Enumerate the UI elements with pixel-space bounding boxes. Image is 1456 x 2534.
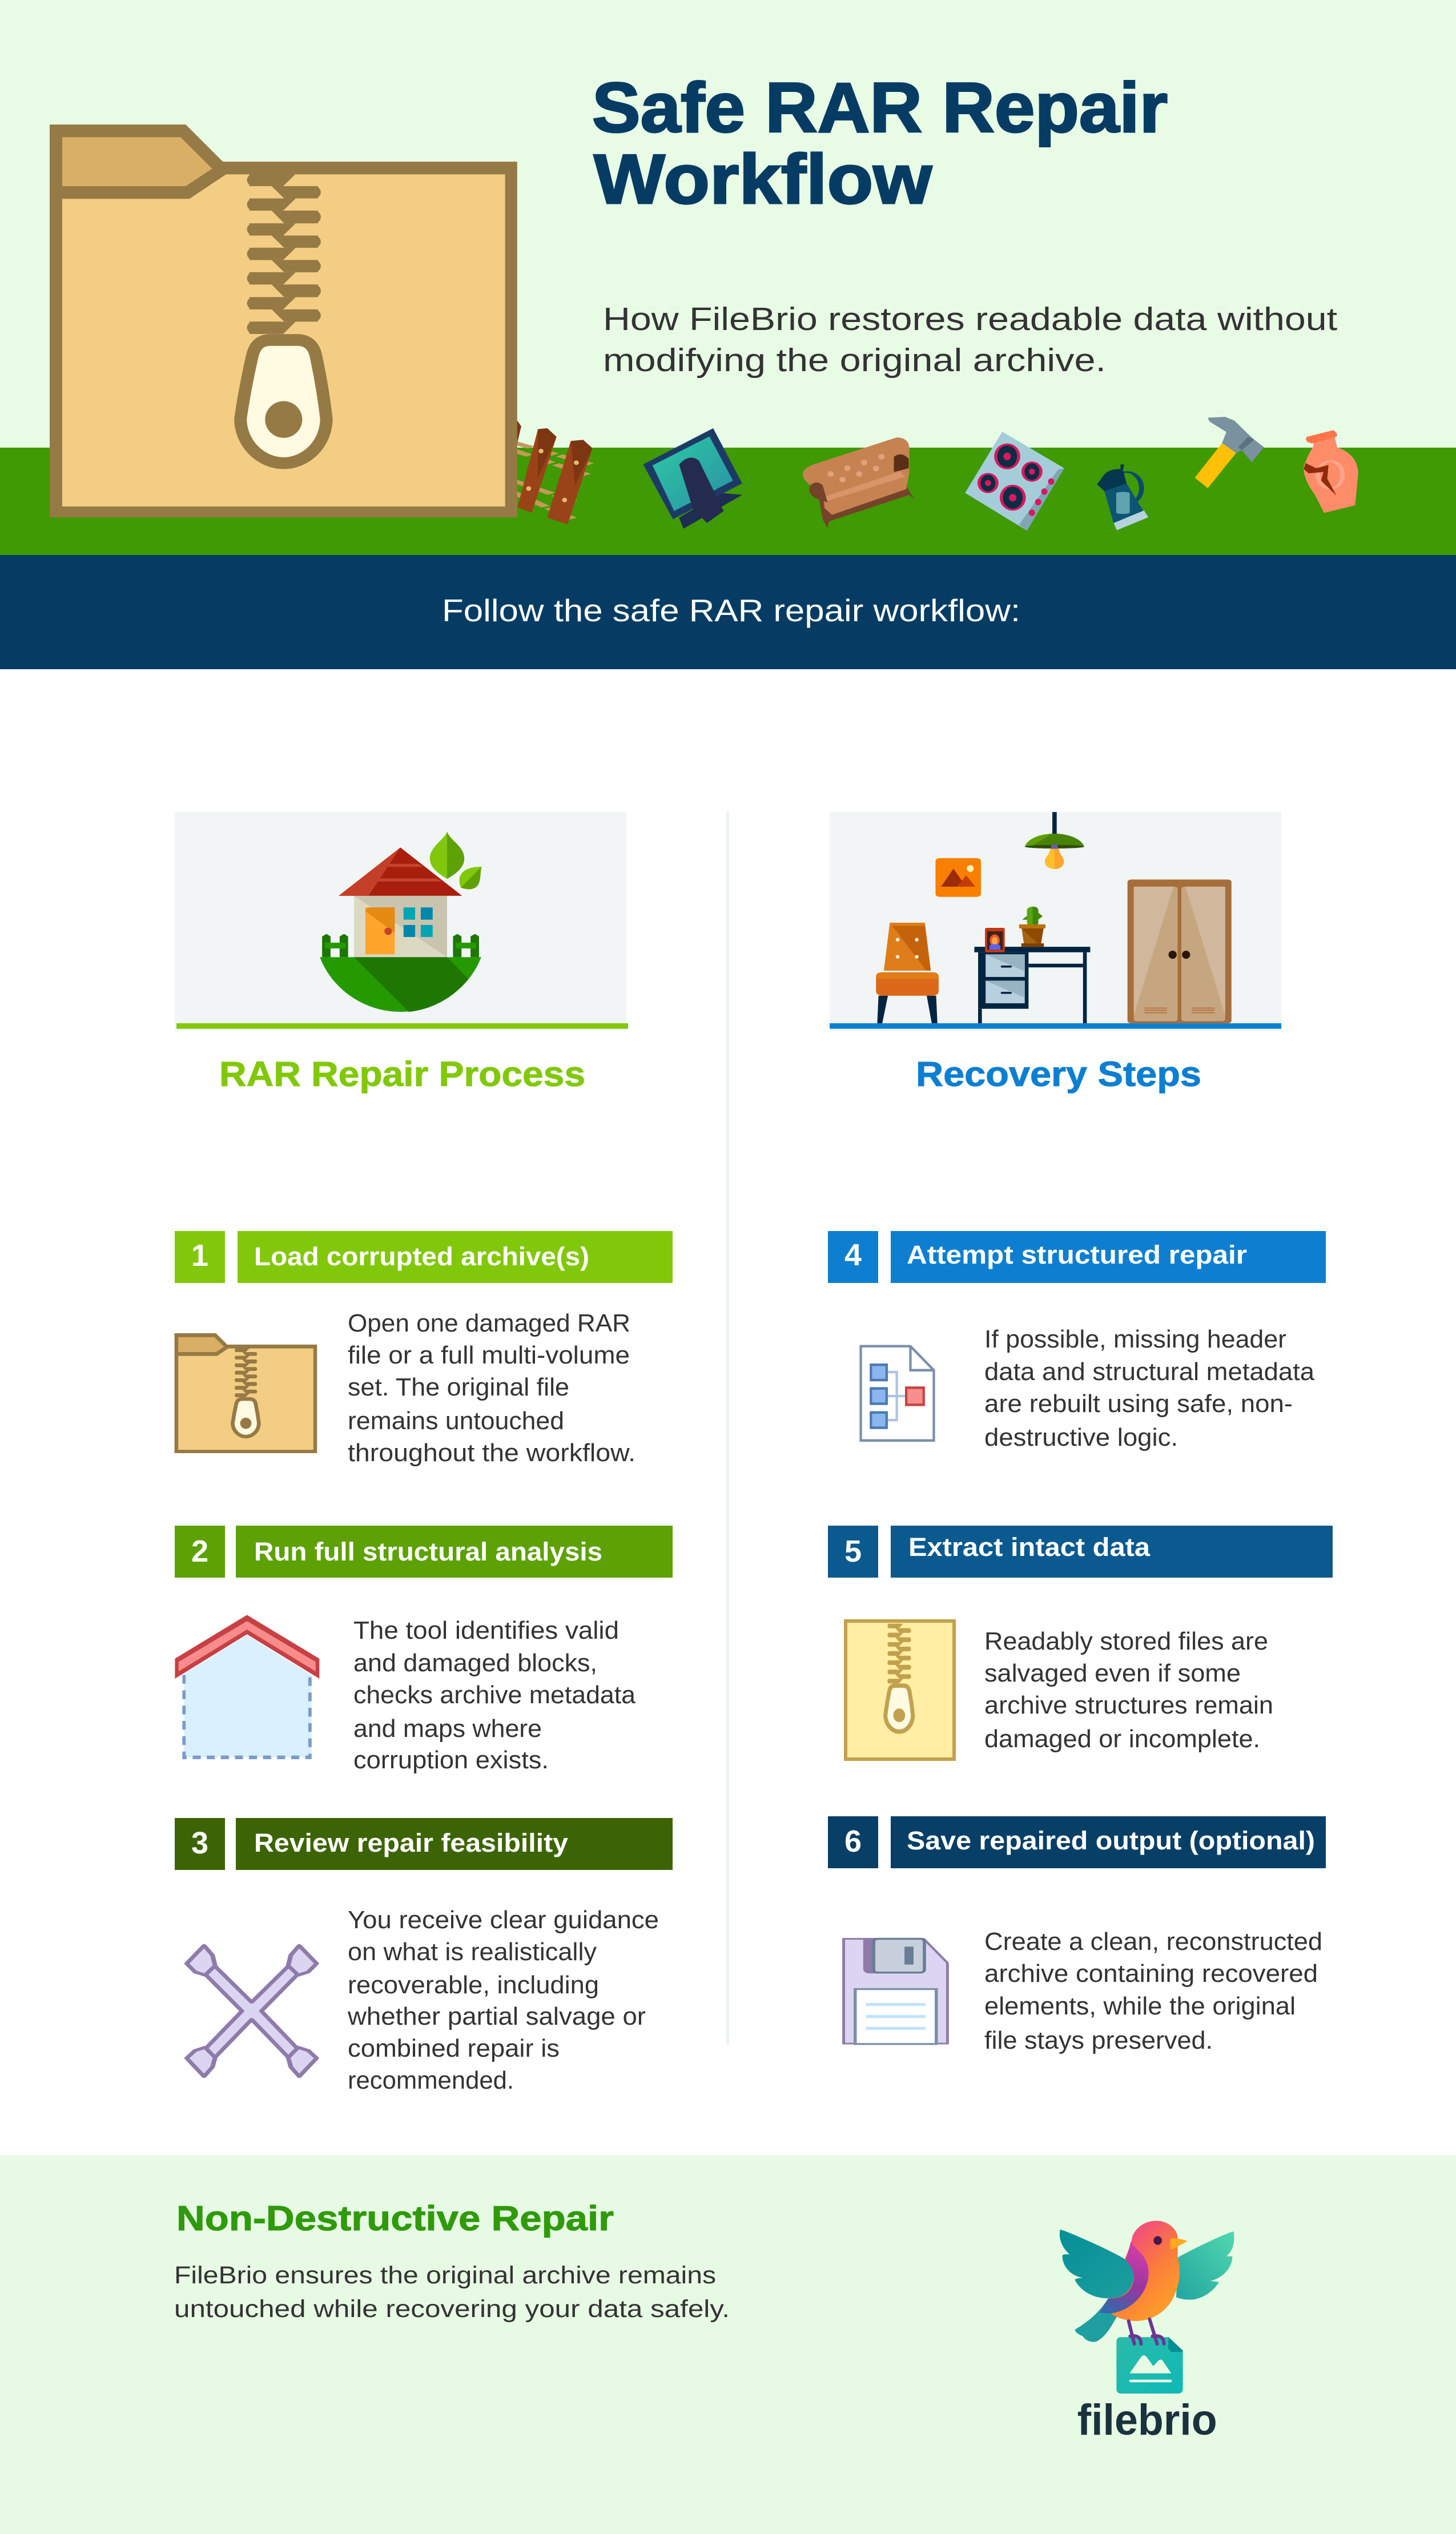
step 4 text [984,1325,1315,1451]
icon: structure document [861,1346,934,1441]
icon: wardrobe [1128,879,1232,1023]
panel: green ground band [0,448,1456,555]
title: Workflow [594,140,932,219]
banner [0,555,1456,669]
icon: photo frame [985,928,1005,952]
title bar 3 [236,1818,673,1870]
icon: fence [510,421,593,524]
step 2 text: The tool identifies valid [353,1616,619,1644]
subtitle [603,301,1337,379]
icon: beak [1170,2238,1188,2250]
banner text: Follow the safe RAR repair workflow: [442,593,1020,628]
title: Safe RAR Repair [592,69,1168,147]
step 5 text: archive structures remain [984,1691,1273,1719]
title bar 5 [891,1526,1333,1578]
icon: ground [320,957,481,1012]
step 2 text: and damaged blocks, [353,1649,597,1677]
icon: kettle [1097,464,1148,530]
title bar 6 [891,1816,1326,1868]
step 5 text: salvaged even if some [984,1659,1241,1687]
number badge 6 [828,1816,878,1868]
subtitle: How FileBrio restores readable data without [603,301,1337,337]
step 3 text: recoverable, including [348,1971,599,1999]
step 4 text: If possible, missing header [984,1325,1286,1353]
footer text [174,2262,730,2323]
icon: fences [322,934,479,957]
icon: chair [876,923,939,1023]
step 5 text [984,1627,1273,1753]
wordmark: filebrio [1077,2396,1217,2444]
number 1: 1 [191,1238,208,1273]
step 4 text: are rebuilt using safe, non- [984,1390,1293,1418]
title bar 4 [891,1231,1326,1283]
step 1 text: remains untouched [348,1407,564,1435]
step 3 text: whether partial salvage or [347,2002,646,2030]
step 6 text: Create a clean, reconstructed [984,1928,1322,1956]
icon: fallen monitor [643,428,742,529]
step 6 text: archive containing recovered [984,1960,1318,1988]
step 3 text: recommended. [348,2066,514,2094]
step 4 [828,1231,1326,1451]
icon: cooktop [965,432,1064,530]
step 1 text [348,1309,636,1467]
icon: desk [974,947,1090,1023]
step 3 title: Review repair feasibility [254,1828,568,1857]
panel: house illustration [175,812,628,1031]
step 1 text: file or a full multi-volume [348,1341,630,1369]
step 3 text [347,1906,659,2094]
title bar 1 [238,1231,673,1283]
icon: floppy disk [844,1938,947,2044]
icon: body [1099,2221,1180,2321]
number 6: 6 [844,1824,862,1859]
icon: eye [1153,2236,1162,2245]
step 6 [828,1816,1326,2054]
icon: house outline [175,1615,319,1757]
title bar 2 [236,1526,673,1578]
number 3: 3 [191,1826,208,1860]
number badge 4 [828,1231,878,1283]
heading: RAR Repair Process: RAR Repair Process [219,1055,585,1093]
panel: footer background [0,2155,1456,2534]
step 1 text: Open one damaged RAR [348,1309,630,1337]
icon: cross wrench [187,1945,317,2077]
step 1 text: throughout the workflow. [348,1439,636,1467]
panel: header background [0,0,1456,448]
icon: hammer [1194,417,1264,488]
number 4: 4 [844,1238,862,1272]
icon: house [339,847,462,957]
icon: broken vase [1304,430,1358,513]
icon: document [1116,2337,1183,2394]
step 4 title: Attempt structured repair [907,1240,1247,1269]
panel: room illustration [830,812,1281,1031]
number badge 2 [175,1526,225,1578]
footer text: FileBrio ensures the original archive remains [174,2262,716,2289]
step 3 [175,1818,673,2094]
step 4 text: destructive logic. [984,1423,1178,1451]
icon: zip file [846,1621,954,1759]
column divider [726,811,729,2044]
title [592,69,1168,219]
footer text: untouched while recovering your data safely. [174,2295,730,2323]
step 2 text: and maps where [353,1715,542,1743]
step 2 text: checks archive metadata [353,1681,636,1709]
step 1 text: set. The original file [348,1373,569,1401]
step 3 text: on what is realistically [348,1938,597,1966]
ground objects row [510,417,1358,530]
footer heading: Non-Destructive Repair [176,2199,614,2238]
icon: picture [935,858,981,897]
icon: purple band [1099,2242,1149,2314]
step 1 title: Load corrupted archive(s) [254,1242,589,1271]
logo: filebrio bird [1060,2221,1234,2444]
icon: lamp [1025,812,1084,869]
step 2 title: Run full structural analysis [254,1537,602,1566]
step 2 text [353,1616,636,1774]
number badge 5 [828,1526,878,1578]
number badge 3 [175,1818,225,1870]
icon: cactus [1019,907,1045,947]
heading: Recovery Steps: Recovery Steps [916,1055,1201,1093]
icon: legs [1129,2319,1164,2344]
icon: zipped folder [175,1333,317,1453]
icon: left wing [1060,2230,1133,2298]
number badge 1 [175,1231,225,1283]
icon: leaves [430,831,481,889]
number 5: 5 [844,1534,862,1568]
subtitle: modifying the original archive. [603,342,1106,379]
step 5 text: damaged or incomplete. [984,1725,1260,1753]
step 6 text [984,1928,1322,2054]
icon: sofa [803,437,914,528]
step 4 text: data and structural metadata [984,1358,1315,1386]
step 6 text: elements, while the original [984,1992,1296,2020]
step 6 text: file stays preserved. [984,2026,1213,2054]
icon: large zipped folder [50,124,517,517]
step 5 [828,1526,1333,1759]
step 2 [175,1526,673,1774]
step 3 text: combined repair is [348,2034,560,2062]
icon: right wing [1176,2231,1234,2300]
step 2 text: corruption exists. [353,1746,549,1774]
step 1 [175,1231,673,1467]
number 2: 2 [191,1534,208,1568]
step 6 title: Save repaired output (optional) [907,1826,1315,1855]
icon: tail [1075,2299,1117,2342]
step 3 text: You receive clear guidance [348,1906,659,1934]
step 5 title: Extract intact data [908,1533,1151,1562]
step 5 text: Readably stored files are [984,1627,1268,1655]
